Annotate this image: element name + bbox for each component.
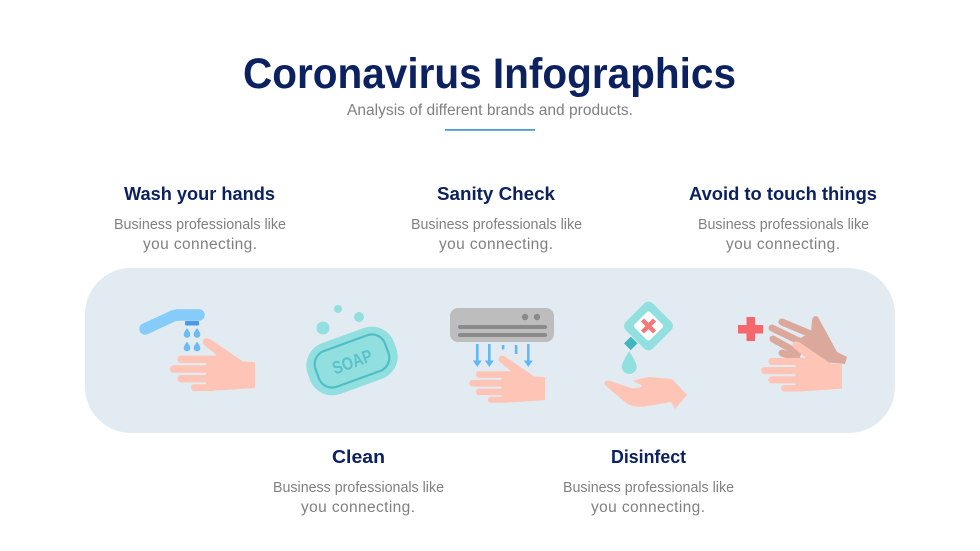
text block: disinfect <box>563 446 734 516</box>
text block: clean: Clean <box>332 446 385 467</box>
text block: wash your hands: Wash your hands <box>124 183 275 204</box>
text block: clean: Business professionals like <box>273 479 444 496</box>
icon: hand dryer and hand <box>450 308 554 403</box>
icon: sanitizer bottle and hand <box>604 299 687 409</box>
subtitle: Analysis of different brands and products. <box>347 102 633 119</box>
text block: disinfect: you connecting. <box>591 499 705 516</box>
text block: avoid to touch things: Business professionals like <box>698 216 869 233</box>
text block: disinfect: Disinfect <box>611 446 686 467</box>
title underline <box>445 129 535 131</box>
icon: soap bar: SOAP <box>330 346 375 378</box>
icon: soap bar <box>300 305 404 402</box>
text block: wash your hands: you connecting. <box>143 236 257 253</box>
title: Coronavirus Infographics <box>243 50 736 98</box>
icon: cross and two hands <box>738 316 847 392</box>
text block: avoid to touch things: Avoid to touch things <box>689 183 877 204</box>
text block: sanity check: you connecting. <box>439 236 553 253</box>
text block: clean <box>273 446 444 516</box>
panel: icon band <box>85 268 895 433</box>
text block: sanity check: Sanity Check <box>437 183 556 204</box>
text block: sanity check: Business professionals like <box>411 216 582 233</box>
text block: sanity check <box>411 183 582 253</box>
text block: wash your hands <box>114 183 286 253</box>
text block: wash your hands: Business professionals like <box>114 216 286 233</box>
text block: avoid to touch things: you connecting. <box>726 236 840 253</box>
text block: disinfect: Business professionals like <box>563 479 734 496</box>
text block: avoid to touch things <box>689 183 877 253</box>
text block: clean: you connecting. <box>301 499 415 516</box>
icon: tap and hand <box>145 315 255 391</box>
